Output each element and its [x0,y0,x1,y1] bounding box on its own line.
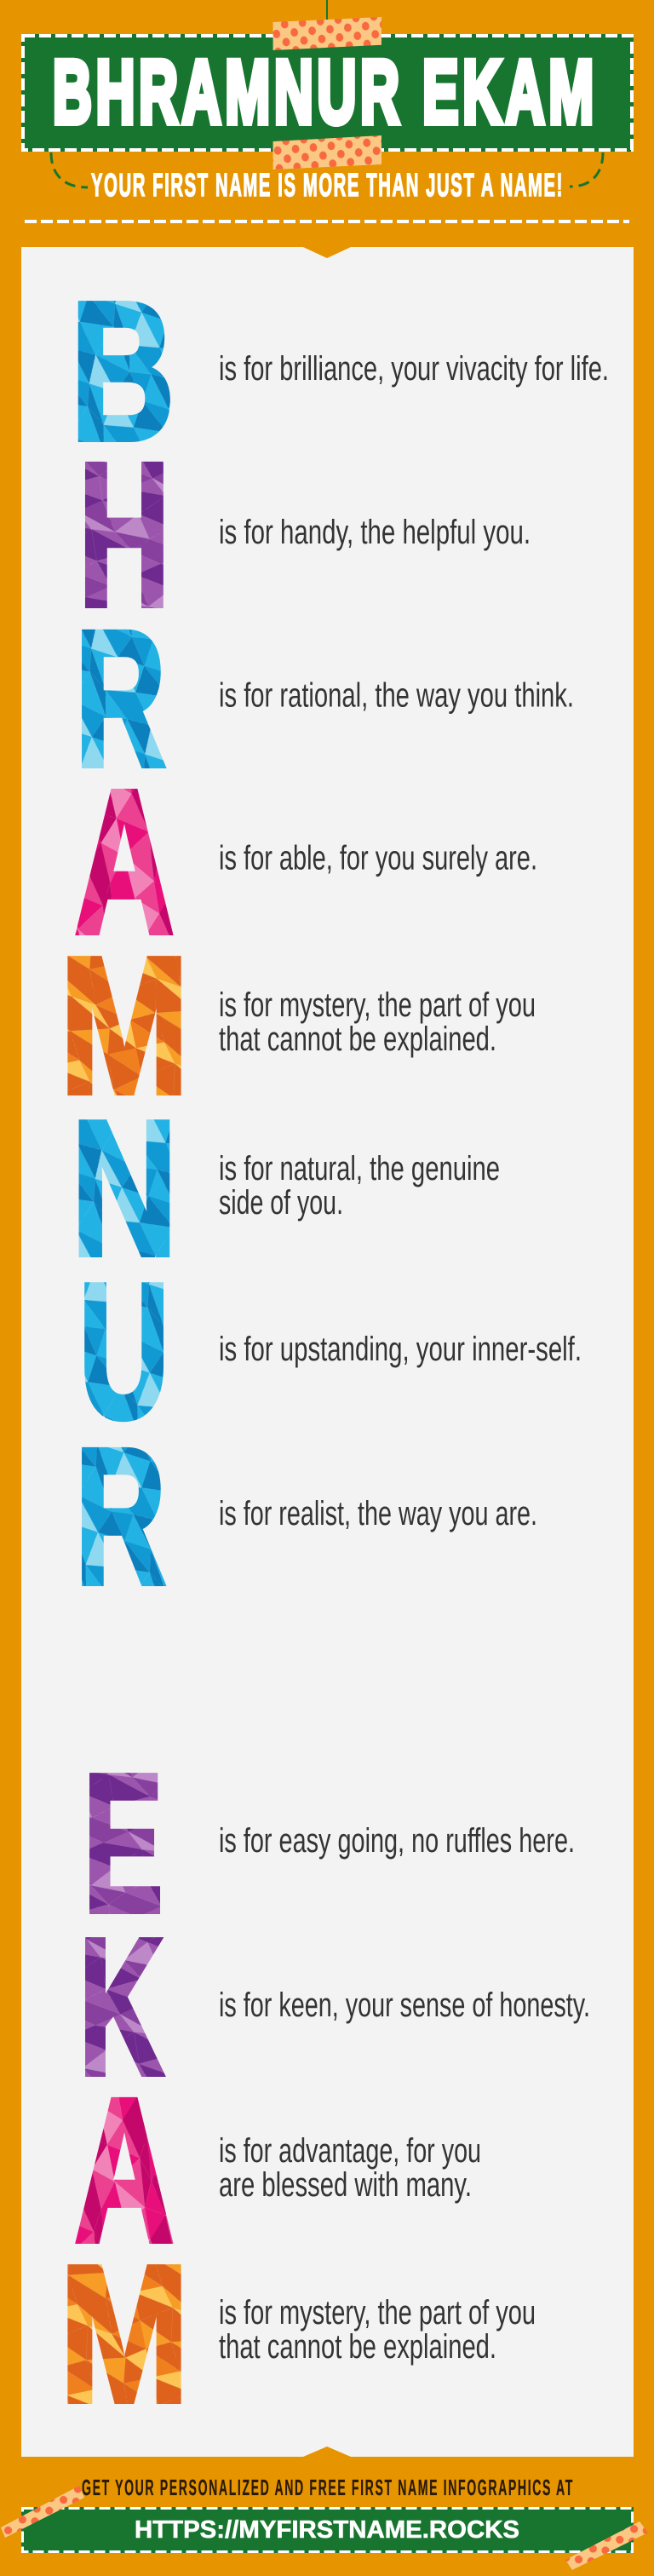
banner dashed border [23,36,632,150]
text: advantage line 2: are blessed with many. [219,2166,472,2204]
left dashed connector [51,152,88,187]
letter M: M [60,2227,189,2443]
text: mystery: is for mystery, the part of you [219,986,536,1024]
row: A [75,748,537,976]
left washi tape [1,2486,84,2538]
text: mystery: is for mystery, the part of you [219,2294,536,2332]
letter U: U [79,1244,169,1458]
header dashed divider [25,220,629,223]
row: R [75,591,574,808]
letter N: N [72,1080,177,1295]
text: mystery line 2: that cannot be explained. [219,2328,496,2366]
text: able: is for able, for you surely are. [219,840,537,877]
row: R [75,1409,537,1625]
letter A: A [75,2056,174,2285]
green URL banner [21,2507,634,2553]
URL banner dashed border [22,2508,632,2552]
letter B: B [71,261,175,480]
letter R: R [75,1409,165,1625]
row: U [79,1244,582,1458]
letter R: R [75,591,165,808]
right washi tape [565,2521,648,2570]
letter A: A [75,748,174,976]
text: handy: is for handy, the helpful you. [219,514,531,551]
row: H [78,421,531,649]
right dashed connector [570,152,603,187]
letter K: K [79,1900,164,2116]
letter E: E [83,1733,163,1952]
text: mystery line 2: that cannot be explained. [219,1021,496,1058]
text: natural line 2: side of you. [219,1184,343,1222]
panel: footer [1,2475,648,2570]
text: advantage: is for advantage, for you [219,2132,481,2170]
letter M: M [60,918,189,1135]
row: M [60,2227,536,2443]
row: B [71,261,609,480]
top washi tape [273,17,382,50]
row: K [79,1900,590,2116]
row: A [75,2056,481,2285]
hanging string [326,0,328,20]
row: N [72,1080,500,1295]
green title banner [21,34,634,152]
panel: header [21,0,634,221]
text: natural: is for natural, the genuine [219,1150,500,1187]
row: E [83,1733,575,1952]
lower washi tape [273,135,382,170]
text: realist: is for realist, the way you are. [219,1495,537,1532]
row: M [60,918,536,1135]
URL text: HTTPS://MYFIRSTNAME.ROCKS [135,2516,519,2544]
letter H: H [78,421,170,649]
